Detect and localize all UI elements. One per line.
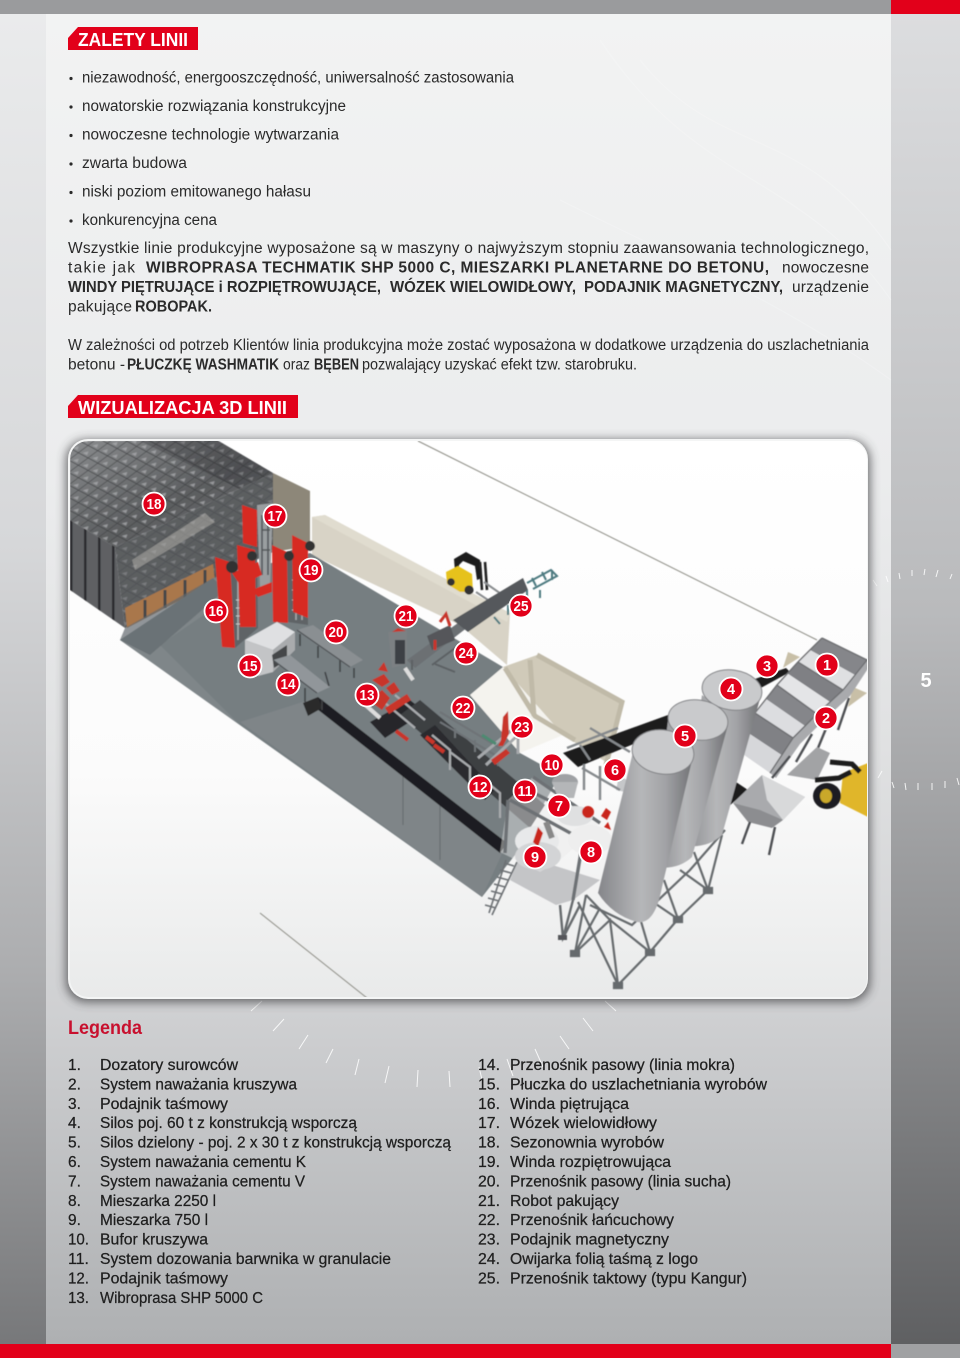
numbered markers: 14 [280, 677, 296, 693]
legend: items 14-25: Przenośnik pasowy (linia sucha) [510, 1173, 731, 1190]
numbered markers: 17 [268, 509, 282, 525]
numbered markers: 25 [514, 599, 528, 615]
legend: items 14-25: Przenośnik pasowy (linia mokra) [510, 1057, 735, 1074]
tan pads [783, 652, 867, 707]
legend: items 14-25: 16. [478, 1096, 500, 1113]
paragraph: options: betonu - [68, 356, 125, 374]
legend: items 14-25: 15. [478, 1076, 500, 1093]
paragraph: machines: nowoczesne [782, 260, 869, 276]
legend: items 14-25: 17. [478, 1115, 500, 1132]
heading: legenda: Legenda [68, 1017, 142, 1039]
benefits list [69, 70, 514, 229]
legend: items 1-13: System naważania cementu V [100, 1173, 306, 1190]
paragraph: machines: Wszystkie linie produkcyjne wyposażone są w maszyny o najwyższym stopniu zaawansowania technologicznego, [68, 240, 869, 257]
legend: items 14-25: 21. [478, 1193, 500, 1210]
legend: items 14-25: 25. [478, 1270, 500, 1287]
red lifts and stacks [215, 505, 315, 648]
benefits list: nowatorskie rozwiązania konstrukcyjne [82, 98, 346, 115]
legend: items 1-13: System naważania kruszywa [100, 1076, 297, 1093]
legend: items 1-13: System dozowania barwnika w granulacie [100, 1251, 391, 1268]
legend: items 1-13: 11. [68, 1251, 89, 1268]
legend: items 1-13: 7. [68, 1173, 81, 1190]
paragraph: machines: PODAJNIK MAGNETYCZNY, [584, 279, 783, 296]
legend: items 1-13: Podajnik taśmowy [100, 1270, 228, 1287]
benefits list: niski poziom emitowanego hałasu [82, 184, 311, 200]
middle belt with frame [563, 715, 670, 800]
mixer platform and frame [500, 777, 600, 940]
legend: items 1-13: 8. [68, 1193, 81, 1210]
legend: items 1-13: 13. [68, 1290, 89, 1307]
conveyors 22 and 23 [440, 711, 518, 766]
numbered markers: 22 [456, 701, 470, 717]
paragraph: machines: WINDY PIĘTRUJĄCE i ROZPIĘTROWUJĄCE, [68, 279, 381, 296]
numbered markers: 16 [208, 604, 224, 620]
numbered markers: 18 [146, 497, 162, 513]
top belt [730, 668, 790, 806]
paragraph: options: PŁUCZKĘ WASHMATIK [127, 356, 280, 374]
legend: items 1-13: 9. [68, 1212, 81, 1229]
legend: items 1-13: 5. [68, 1135, 81, 1152]
legend: items 1-13: System naważania cementu K [100, 1154, 307, 1171]
conveyors 14 and 20 [273, 625, 363, 710]
paragraph: options: W zależności od potrzeb Klientów linia produkcyjna może zostać wyposażona w dodatkowe urządzenia do uszlachetniania [68, 337, 869, 354]
legend: items 14-25: Owijarka folią taśmą z logo [510, 1251, 698, 1268]
legend: items 14-25: Podajnik magnetyczny [510, 1232, 669, 1249]
legend: items 14-25: 23. [478, 1232, 500, 1249]
numbered markers [142, 492, 838, 868]
legend: items 14-25: 22. [478, 1212, 500, 1229]
numbered markers: 24 [458, 646, 474, 662]
numbered markers: 15 [242, 659, 258, 675]
curing building [70, 440, 310, 628]
heading: zalety linii: ZALETY LINII [78, 30, 188, 50]
legend: items 14-25: Płuczka do uszlachetniania wyrobów [510, 1076, 768, 1093]
legend: items 14-25: Winda piętrująca [510, 1096, 629, 1113]
paragraph: machines: ROBOPAK. [135, 298, 212, 316]
paragraph: options: pozwalający uzyskać efekt tzw. starobruku. [362, 356, 637, 374]
legend: items 1-13: Wibroprasa SHP 5000 C [100, 1290, 263, 1307]
legend: items 1-13: 10. [68, 1232, 89, 1249]
legend: items 14-25: Sezonownia wyrobów [510, 1135, 665, 1152]
legend: items 1-13: Podajnik taśmowy [100, 1096, 228, 1113]
legend: items 14-25: Robot pakujący [510, 1193, 619, 1210]
forklift [446, 552, 504, 604]
mixers [515, 774, 627, 870]
numbered markers: 9 [531, 850, 539, 866]
paragraph: machines [68, 240, 869, 316]
stairs [485, 860, 517, 915]
legend: items 1-13: 2. [68, 1076, 81, 1093]
legend: items 14-25: Wózek wielowidłowy [510, 1115, 657, 1132]
numbered markers: 5 [681, 729, 689, 745]
legend: items 1-13: Silos dzielony - poj. 2 x 30 t z konstrukcją wsporczą [100, 1135, 451, 1152]
thin site boundary lines [260, 441, 817, 998]
paragraph: machines: urządzenie [792, 279, 869, 296]
legend: items 1-13 [68, 1057, 451, 1307]
decorative ticks [251, 569, 959, 1087]
paragraph: options [68, 337, 869, 374]
silos [598, 666, 764, 922]
numbered markers: 1 [823, 658, 831, 674]
washer machine [245, 622, 295, 676]
legend: items 14-25: Przenośnik łańcuchowy [510, 1212, 674, 1229]
legend: items 14-25 [478, 1057, 768, 1287]
belts and press line [303, 695, 545, 853]
numbered markers: 8 [587, 845, 595, 861]
paragraph: options: BĘBEN [314, 356, 359, 374]
panel: 3d visualisation [66, 439, 871, 1002]
numbered markers: 6 [611, 763, 619, 779]
legend: items 1-13: 12. [68, 1270, 89, 1287]
legend: items 1-13: 4. [68, 1115, 81, 1132]
legend: items 1-13: Mieszarka 2250 l [100, 1193, 216, 1210]
legend: items 1-13: 1. [68, 1057, 81, 1074]
legend: items 1-13: Mieszarka 750 l [100, 1212, 208, 1229]
legend: items 14-25: 19. [478, 1154, 500, 1171]
numbered markers: 21 [398, 609, 414, 625]
conveyor 24 [408, 610, 466, 673]
numbered markers: 12 [472, 780, 488, 796]
legend: items 1-13: Silos poj. 60 t z konstrukcją wsporczą [100, 1115, 357, 1132]
paragraph: machines: WIBROPRASA TECHMATIK SHP 5000 C, MIESZARKI PLANETARNE DO BETONU, [146, 260, 769, 276]
numbered markers: 19 [304, 563, 318, 579]
numbered markers: 4 [727, 682, 735, 698]
hoppers [737, 638, 871, 778]
numbered markers: 7 [555, 799, 563, 815]
front hopper [733, 775, 805, 855]
legend: items 14-25: Winda rozpiętrowująca [510, 1154, 671, 1171]
numbered markers: 10 [544, 758, 560, 774]
tan wall back [312, 515, 622, 765]
benefits list: zwarta budowa [82, 155, 187, 172]
legend: items 14-25: 18. [478, 1135, 500, 1152]
legend: items 14-25: 24. [478, 1251, 500, 1268]
numbered markers: 23 [514, 720, 530, 736]
numbered markers: 3 [763, 659, 771, 675]
steel legs [571, 830, 725, 988]
lift frames [230, 503, 308, 648]
legend: items 1-13: Bufor kruszywa [100, 1232, 208, 1249]
page number: 5 [920, 670, 932, 692]
paragraph: machines: WÓZEK WIELOWIDŁOWY, [390, 278, 576, 296]
legend: items 14-25: 14. [478, 1057, 500, 1074]
benefits list: nowoczesne technologie wytwarzania [82, 126, 339, 144]
numbered markers: 2 [822, 711, 830, 727]
paragraph: machines: takie jak [68, 260, 135, 276]
heading: wizualizacja 3d linii: WIZUALIZACJA 3D LINII [78, 398, 287, 418]
numbered markers: 11 [518, 784, 532, 800]
numbered markers: 20 [328, 625, 344, 641]
legend: items 1-13: 3. [68, 1096, 81, 1113]
wheel loader [787, 747, 868, 817]
main hall floor [120, 553, 560, 897]
numbered markers: 13 [360, 688, 374, 704]
benefits list: niezawodność, energooszczędność, uniwersalność zastosowania [82, 70, 514, 86]
conveyor 25 [453, 570, 557, 632]
legend: items 14-25: 20. [478, 1173, 500, 1190]
robots 13 and 21 [360, 628, 413, 718]
legend: items 1-13: 6. [68, 1154, 81, 1171]
legend: items 1-13: Dozatory surowców [100, 1057, 239, 1074]
paragraph: options: oraz [283, 356, 310, 374]
legend: items 14-25: Przenośnik taktowy (typu Kangur) [510, 1270, 747, 1287]
benefits list: konkurencyjna cena [82, 212, 217, 229]
paragraph: machines: pakujące [68, 298, 132, 316]
